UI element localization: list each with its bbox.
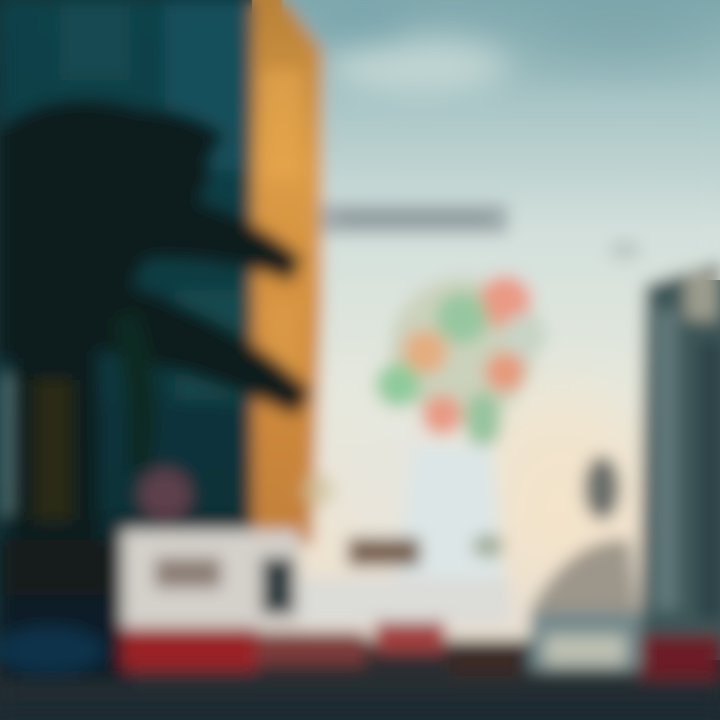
small balloons near orange building <box>139 469 334 521</box>
dark band behind vehicles <box>0 640 720 720</box>
sign bar in the sky <box>320 204 508 234</box>
street <box>0 680 720 720</box>
palm tree <box>0 100 312 600</box>
bright window edge on the left <box>0 375 14 515</box>
right skyscraper <box>609 240 720 640</box>
balloon cluster <box>376 276 547 448</box>
orange building <box>250 0 322 545</box>
white pedestal below balloons <box>395 445 505 590</box>
white vehicle and sign near centre <box>300 534 510 652</box>
distant dark buildings and trees <box>530 456 640 630</box>
white van with red stripe <box>122 530 365 670</box>
low street band of cars on left <box>0 540 130 690</box>
cars on right side of street <box>450 612 720 679</box>
teal glass building <box>0 0 252 640</box>
